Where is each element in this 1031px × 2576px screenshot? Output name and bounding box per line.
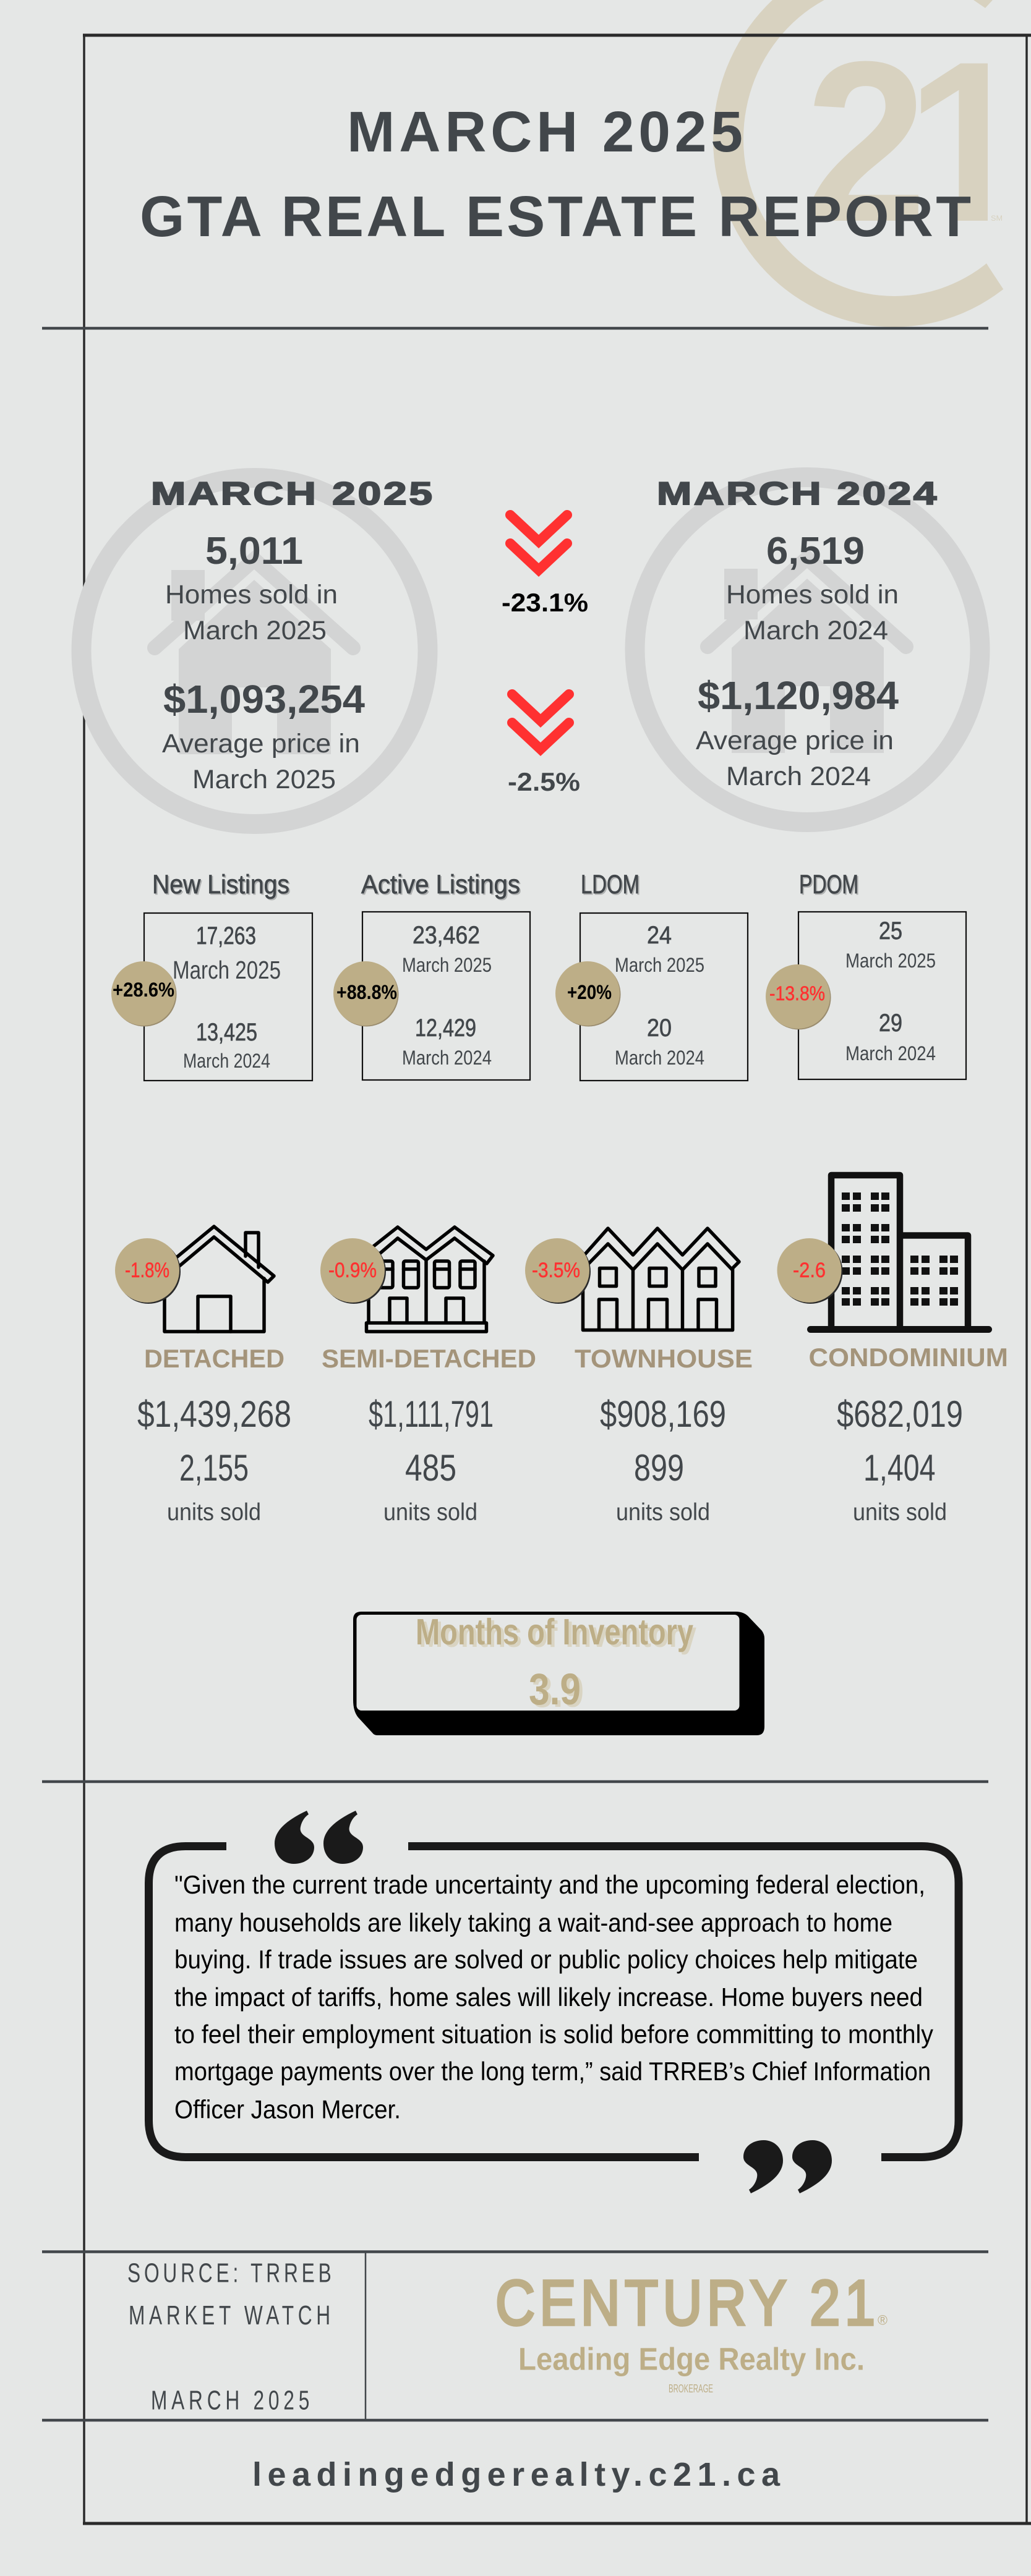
homes sold change: -23.1% bbox=[502, 588, 588, 617]
icon: townhouses bbox=[579, 1228, 739, 1330]
Condominium: 1,404 bbox=[863, 1447, 935, 1489]
Active Listings: +88.8% bbox=[336, 981, 397, 1003]
Condominium: -2.6 bbox=[793, 1259, 826, 1282]
watermark: Century 21 seal: SM bbox=[991, 214, 1003, 223]
quote text: mortgage payments over the long term,” said TRREB’s Chief Information bbox=[174, 2057, 931, 2086]
icon: semi-detached houses bbox=[362, 1227, 493, 1332]
title bbox=[140, 100, 971, 249]
panel: months of inventory bbox=[353, 1612, 764, 1735]
Townhouse: $908,169 bbox=[600, 1393, 726, 1435]
column: March 2025: Homes sold in bbox=[165, 580, 338, 610]
Semi-detached: units sold bbox=[383, 1499, 477, 1526]
quote text: "Given the current trade uncertainty and the upcoming federal election, bbox=[174, 1870, 925, 1899]
PDOM bbox=[766, 870, 966, 1079]
icon: red double chevron, homes sold bbox=[510, 515, 567, 570]
column: March 2025: March 2025 bbox=[183, 616, 327, 645]
panel: months of inventory: Months of Inventory bbox=[416, 1612, 693, 1652]
column: March 2024 bbox=[657, 475, 937, 791]
column: March 2024: 6,519 bbox=[766, 530, 865, 572]
LDOM: +20% bbox=[567, 981, 612, 1003]
PDOM: -13.8% bbox=[769, 982, 825, 1005]
icon: house in circle, right bbox=[635, 477, 980, 822]
Active Listings: March 2024 bbox=[402, 1047, 492, 1069]
New Listings: 17,263 bbox=[196, 922, 256, 950]
quote text: to feel their employment situation is solid before committing to monthly bbox=[174, 2020, 933, 2049]
Detached: units sold bbox=[167, 1499, 261, 1526]
Detached: 2,155 bbox=[179, 1447, 249, 1489]
LDOM: LDOM bbox=[581, 870, 640, 899]
icon: house in circle, left bbox=[82, 478, 428, 824]
LDOM: March 2024 bbox=[615, 1047, 704, 1069]
icon: condominium towers bbox=[810, 1175, 988, 1329]
PDOM: 25 bbox=[879, 917, 902, 945]
Semi-detached: 485 bbox=[405, 1447, 456, 1489]
quote text: Officer Jason Mercer. bbox=[174, 2094, 401, 2124]
website: leadingedgerealty.c21.ca bbox=[252, 2456, 781, 2493]
column: March 2025: March 2025 bbox=[192, 765, 336, 794]
panel: source: MARCH 2025 bbox=[151, 2385, 309, 2416]
Semi-detached bbox=[320, 1227, 536, 1526]
logo: Century 21 Leading Edge Realty: CENTURY 21 bbox=[495, 2268, 875, 2339]
Semi-detached: SEMI-DETACHED bbox=[322, 1344, 536, 1373]
Condominium bbox=[777, 1175, 1008, 1526]
panel: source: SOURCE: TRREB bbox=[127, 2258, 332, 2289]
PDOM: PDOM bbox=[799, 870, 858, 899]
panel: property types bbox=[115, 1175, 1008, 1526]
column: March 2024: Average price in bbox=[696, 726, 894, 755]
LDOM: March 2025 bbox=[615, 954, 704, 976]
watermark: Century 21 seal: 1 bbox=[905, 14, 1031, 270]
panel: source bbox=[127, 2253, 366, 2419]
column: March 2025 bbox=[151, 475, 432, 794]
Condominium: $682,019 bbox=[837, 1393, 963, 1435]
column: March 2024: $1,120,984 bbox=[698, 673, 899, 718]
panel: March 2025 vs March 2024 bbox=[82, 475, 980, 824]
column: March 2024: Homes sold in bbox=[726, 580, 899, 610]
LDOM: 24 bbox=[647, 922, 672, 949]
Active Listings: Active Listings bbox=[361, 870, 520, 899]
icon: red double chevron, average price bbox=[512, 694, 569, 749]
Townhouse: 899 bbox=[634, 1447, 684, 1489]
title: GTA REAL ESTATE REPORT bbox=[140, 184, 971, 249]
panel: quote bbox=[148, 1811, 959, 2193]
New Listings: 13,425 bbox=[196, 1019, 257, 1046]
LDOM: 20 bbox=[647, 1014, 672, 1042]
Semi-detached: $1,111,791 bbox=[369, 1393, 494, 1435]
Active Listings: March 2025 bbox=[402, 954, 492, 976]
icon: closing quotation mark bbox=[743, 2140, 832, 2193]
column: March 2025: MARCH 2025 bbox=[151, 475, 432, 511]
Condominium: CONDOMINIUM bbox=[809, 1343, 1008, 1372]
Townhouse bbox=[525, 1228, 753, 1526]
quote text: many households are likely taking a wait-and-see approach to home bbox=[174, 1908, 892, 1937]
Semi-detached: -0.9% bbox=[328, 1259, 377, 1282]
Active Listings bbox=[333, 870, 530, 1080]
New Listings: New Listings bbox=[152, 870, 289, 899]
panel: months of inventory: 3.9 bbox=[529, 1665, 581, 1714]
Townhouse: -3.5% bbox=[532, 1259, 580, 1282]
New Listings: +28.6% bbox=[113, 979, 174, 1001]
column: March 2024: March 2024 bbox=[726, 762, 871, 791]
Detached bbox=[115, 1226, 291, 1526]
quote text bbox=[174, 1870, 933, 2124]
icon: opening quotation mark bbox=[275, 1811, 363, 1864]
logo: Century 21 Leading Edge Realty: Leading Edge Realty Inc. bbox=[518, 2342, 865, 2376]
Active Listings: 12,429 bbox=[415, 1014, 476, 1042]
column: March 2024: March 2024 bbox=[743, 616, 888, 645]
watermark: Century 21 seal: 2 bbox=[805, 14, 927, 270]
panel: listings stats bbox=[111, 870, 966, 1081]
PDOM: March 2024 bbox=[845, 1042, 936, 1065]
Active Listings: 23,462 bbox=[413, 922, 480, 949]
average price change: -2.5% bbox=[508, 767, 580, 796]
New Listings: March 2024 bbox=[183, 1050, 270, 1072]
Condominium: units sold bbox=[853, 1499, 947, 1526]
logo: Century 21 Leading Edge Realty bbox=[495, 2268, 888, 2395]
Townhouse: units sold bbox=[616, 1499, 710, 1526]
title: MARCH 2025 bbox=[347, 100, 743, 164]
Detached: -1.8% bbox=[125, 1259, 169, 1282]
LDOM bbox=[555, 870, 748, 1081]
column: March 2025: $1,093,254 bbox=[163, 677, 365, 721]
quote text: buying. If trade issues are solved or public policy choices help mitigate bbox=[174, 1945, 918, 1974]
panel: source: MARKET WATCH bbox=[129, 2300, 330, 2331]
New Listings: March 2025 bbox=[173, 956, 281, 984]
Detached: DETACHED bbox=[144, 1344, 284, 1373]
Detached: $1,439,268 bbox=[137, 1393, 291, 1435]
column: March 2024: MARCH 2024 bbox=[657, 475, 937, 511]
column: March 2025: Average price in bbox=[162, 729, 360, 759]
watermark: Century 21 seal bbox=[713, 0, 1031, 327]
PDOM: March 2025 bbox=[845, 950, 936, 972]
New Listings bbox=[111, 870, 312, 1081]
quote text: the impact of tariffs, home sales will likely increase. Home buyers need bbox=[174, 1983, 923, 2012]
column: March 2025: 5,011 bbox=[205, 530, 303, 572]
PDOM: 29 bbox=[879, 1010, 902, 1037]
Townhouse: TOWNHOUSE bbox=[575, 1344, 753, 1373]
icon: detached house bbox=[154, 1226, 274, 1332]
logo: Century 21 Leading Edge Realty: ® bbox=[878, 2312, 888, 2328]
logo: Century 21 Leading Edge Realty: BROKERAGE bbox=[669, 2383, 713, 2395]
